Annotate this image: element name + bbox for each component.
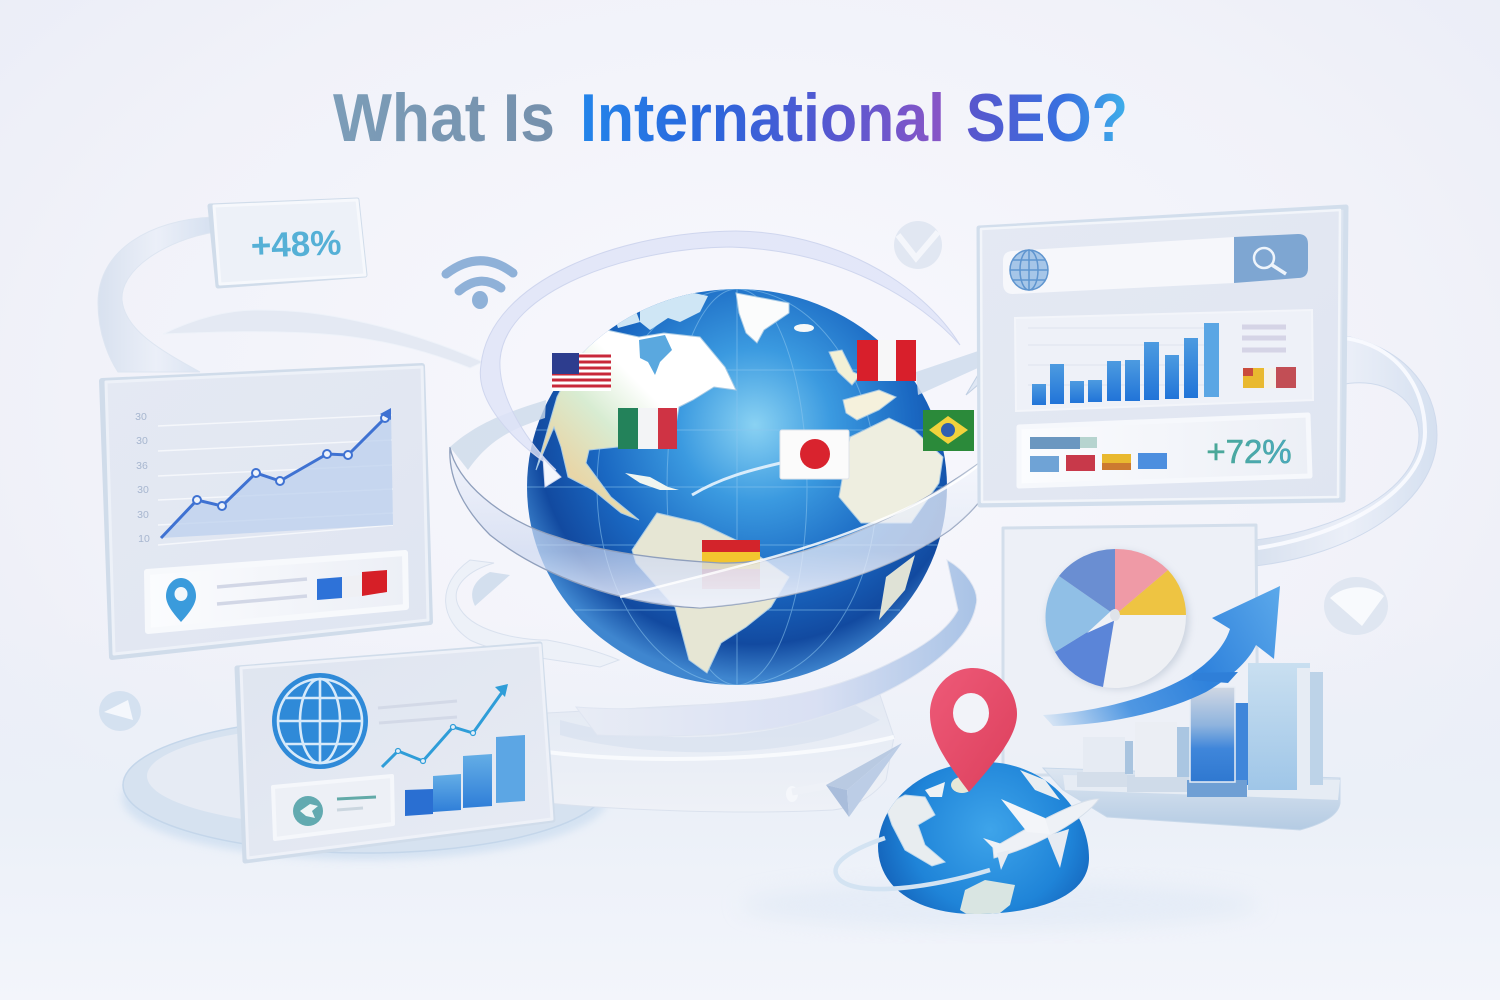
- panel: line chart: [102, 366, 430, 657]
- floor glow: [0, 620, 1500, 1000]
- small ball top: [894, 221, 942, 269]
- pie chart: [1046, 549, 1186, 688]
- main globe: [527, 289, 947, 685]
- card: +48%: [210, 200, 365, 286]
- bar 3: [1235, 663, 1323, 790]
- small ball left: [99, 691, 141, 731]
- flag: Peru: [857, 340, 916, 381]
- line chart area and series: [161, 408, 393, 538]
- title: SEO?: [966, 80, 1128, 156]
- globe icon: [1010, 250, 1048, 290]
- mini card: [273, 776, 393, 839]
- mini flag: [1243, 367, 1296, 388]
- card: +48%: +48%: [250, 223, 342, 266]
- right ribbon: [1255, 335, 1437, 566]
- bar 2: [1127, 722, 1190, 792]
- small ball right: [1324, 577, 1388, 635]
- red location pin: [930, 668, 1017, 792]
- title: International: [580, 80, 945, 156]
- line chart grid and axis labels: 36: [136, 460, 148, 472]
- small globe continents: [885, 770, 1060, 925]
- panel: search dashboard: [979, 207, 1346, 505]
- wifi icon: [446, 261, 513, 309]
- line chart grid and axis labels: [135, 411, 393, 545]
- arrow: growth: [1043, 586, 1280, 726]
- continents and graticule: [527, 289, 947, 685]
- French flag: [317, 570, 387, 600]
- search bar: [1003, 234, 1308, 294]
- line chart grid and axis labels: 30: [137, 509, 149, 521]
- floor shadow under scene: [740, 881, 1260, 929]
- line chart grid and axis labels: 30: [136, 435, 148, 447]
- title: What Is: [333, 80, 555, 156]
- bars: [405, 735, 525, 816]
- panel: pie chart: [1003, 525, 1258, 775]
- lower orbit ring: [446, 560, 619, 667]
- paper plane icon: [826, 743, 902, 817]
- title: [333, 80, 1128, 156]
- globe icon: [272, 673, 368, 769]
- pedestal under globe: [547, 695, 894, 812]
- left ribbon: [98, 217, 483, 372]
- bar chart card: [1015, 310, 1313, 411]
- flag: USA: [552, 353, 611, 391]
- line chart grid and axis labels: 30: [135, 411, 147, 423]
- flag: Italy: [618, 408, 677, 449]
- location card: [147, 553, 406, 631]
- front glass band: [450, 400, 993, 608]
- metrics card: +72%: [1206, 433, 1292, 470]
- panel: globe analytics: [237, 644, 553, 861]
- small globe: [836, 762, 1099, 925]
- left bottom ring base: [122, 717, 608, 860]
- bar 1: [1077, 737, 1133, 787]
- bars: [1032, 323, 1219, 405]
- orbit ring: [836, 838, 990, 889]
- line chart grid and axis labels: 10: [138, 533, 150, 545]
- arrow: top orbit ribbon with head: [480, 231, 960, 487]
- arrow: right orbit with head: [916, 343, 1004, 395]
- magnifier icon: [1254, 248, 1286, 274]
- flag: Spain: [702, 540, 760, 589]
- growth bars platform: [1043, 663, 1340, 830]
- pin icon: [166, 578, 196, 622]
- trend line arrow: [382, 684, 508, 767]
- airplane: [983, 799, 1099, 870]
- line chart grid and axis labels: 30: [137, 484, 149, 496]
- bar 4: [1187, 687, 1247, 797]
- flag: Brazil: [923, 410, 974, 451]
- metrics card: [1019, 415, 1310, 486]
- front orbit ribbon: [576, 560, 977, 736]
- flag: Japan: [780, 430, 849, 479]
